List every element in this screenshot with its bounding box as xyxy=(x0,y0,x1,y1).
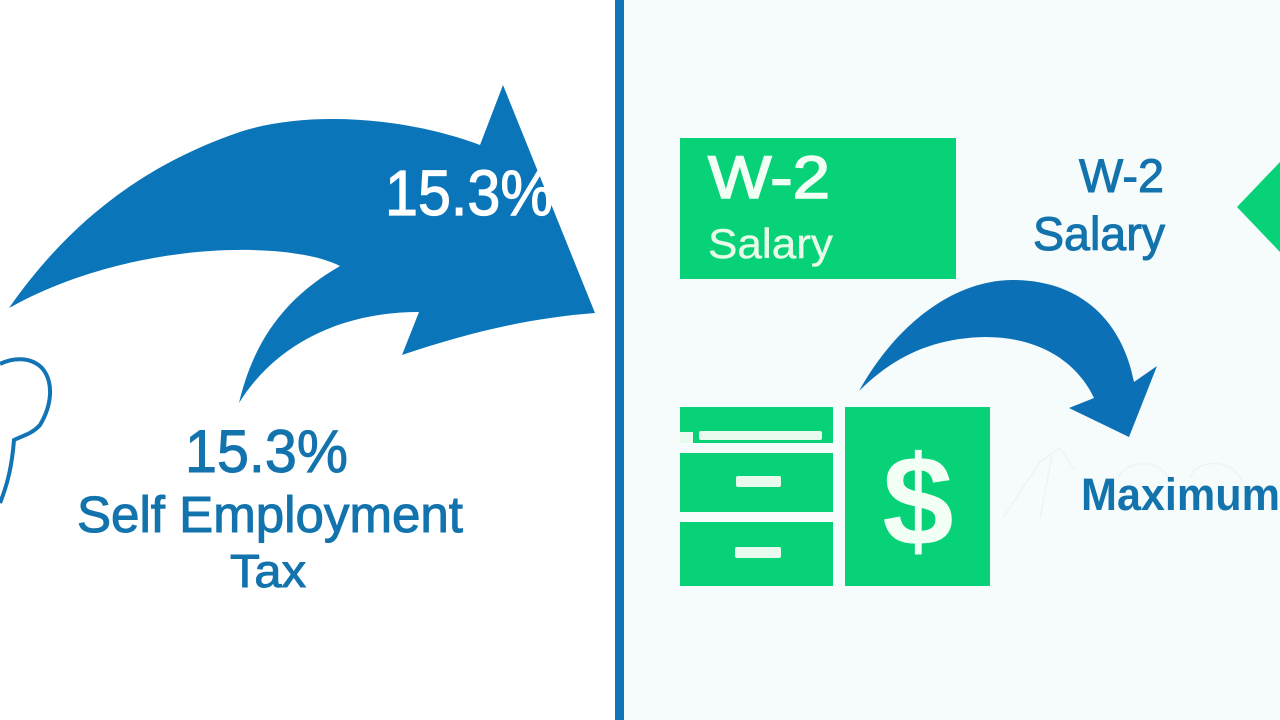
W-2 salary green card xyxy=(680,138,956,279)
label line 2: Tax xyxy=(230,545,306,597)
dollar card background xyxy=(845,407,990,586)
large arrow label: 15.3% xyxy=(385,157,553,229)
icon: green diamond at edge xyxy=(1237,162,1280,252)
label subtitle: Salary xyxy=(1033,207,1165,260)
label title: W-2 xyxy=(1079,149,1164,202)
drawer 3 xyxy=(680,522,833,586)
card subtitle: Salary xyxy=(708,220,833,267)
card background xyxy=(680,138,956,279)
icon: partial head outline xyxy=(0,359,50,503)
cabinet icon xyxy=(680,407,833,586)
drawer 2 handle xyxy=(736,476,781,487)
card title: W-2 xyxy=(708,144,830,211)
self-employment tax text xyxy=(77,418,463,597)
label line 1: Self Employment xyxy=(77,486,463,543)
drawer 3 handle xyxy=(735,547,781,558)
center divider xyxy=(615,0,624,720)
dollar card xyxy=(845,407,990,586)
W-2 salary text label xyxy=(1033,149,1165,260)
large arrow xyxy=(9,85,595,403)
percentage: 15.3% xyxy=(185,418,348,485)
drawer 1 xyxy=(680,407,833,443)
dollar sign: $ xyxy=(882,430,954,573)
panel: right background xyxy=(624,0,1280,720)
drawer 1 tick xyxy=(680,432,693,443)
drawer 2 xyxy=(680,453,833,512)
faint ghost marks xyxy=(1003,448,1242,518)
panel: left background xyxy=(0,0,615,720)
small curved arrow xyxy=(859,280,1157,437)
drawer 1 line xyxy=(699,431,822,440)
